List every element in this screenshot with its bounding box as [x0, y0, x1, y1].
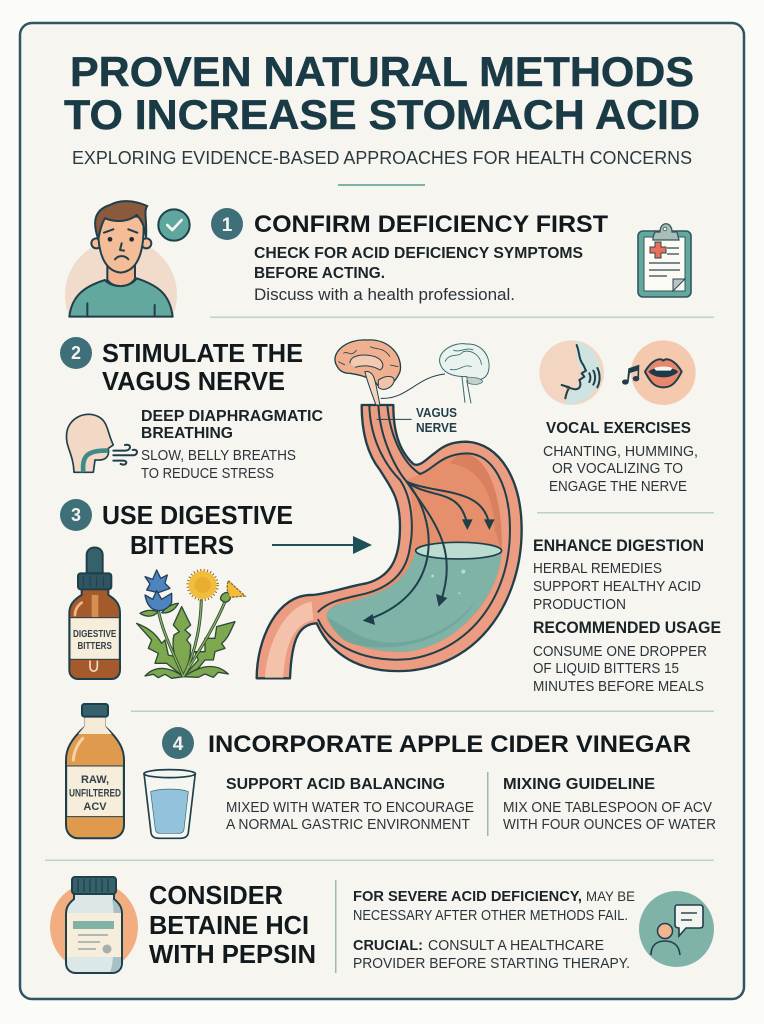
step 2: [60, 337, 303, 396]
text: support acid balancing: MIXED WITH WATER TO ENCOURAGE: [226, 799, 474, 816]
text: check symptoms: BEFORE ACTING.: [254, 265, 385, 282]
nerve arrows: [378, 405, 467, 525]
text: severe deficiency and consult: NECESSARY AFTER OTHER METHODS FAIL.: [353, 907, 628, 924]
text: enhance digestion: PRODUCTION: [533, 596, 626, 613]
text: mixing guideline: [503, 776, 716, 833]
badge 4: [162, 727, 194, 759]
icon: vocal exercises: [539, 340, 696, 405]
stomach outer wall: [257, 405, 522, 678]
badge 2: 2: [71, 343, 81, 363]
badge 1: [211, 208, 243, 240]
text: severe deficiency and consult: PROVIDER BEFORE STARTING THERAPY.: [353, 955, 630, 972]
heading: betaine HCl: CONSIDER: [149, 880, 283, 910]
text: vocal exercises: OR VOCALIZING TO: [552, 460, 683, 477]
text: vocal exercises: CHANTING, HUMMING,: [543, 443, 698, 460]
arrow to stomach: [272, 536, 372, 554]
badge 4: 4: [173, 734, 184, 755]
text: recommended usage: CONSUME ONE DROPPER: [533, 643, 707, 660]
step 3: [60, 499, 293, 560]
text: deep diaphragmatic breathing: SLOW, BELLY BREATHS: [141, 448, 296, 464]
text: enhance digestion: HERBAL REMEDIES: [533, 560, 662, 577]
text: recommended usage: OF LIQUID BITTERS 15: [533, 660, 679, 677]
text: enhance digestion: SUPPORT HEALTHY ACID: [533, 578, 701, 595]
text: severe deficiency and consult: MAY BE: [586, 888, 635, 904]
text: severe deficiency and consult: FOR SEVERE ACID DEFICIENCY,: [353, 888, 582, 905]
text: recommended usage: MINUTES BEFORE MEALS: [533, 678, 704, 695]
title: PROVEN NATURAL METHODS: [70, 48, 694, 95]
title: [64, 48, 700, 138]
icon: clipboard: [638, 224, 691, 297]
text: discuss: Discuss with a health professional.: [254, 285, 515, 304]
icon: apple cider vinegar bottle: RAW,: [81, 774, 109, 786]
step 4: [162, 727, 691, 759]
text: recommended usage: RECOMMENDED USAGE: [533, 619, 721, 637]
heading: stimulate the vagus nerve: STIMULATE THE: [102, 338, 303, 368]
icon: consult provider: [639, 891, 714, 967]
icon: apple cider vinegar bottle: [66, 704, 124, 838]
text: deep diaphragmatic breathing: BREATHING: [141, 425, 233, 442]
icon: digestive bitters bottle: [69, 547, 120, 679]
text: check symptoms: [254, 245, 583, 282]
brain right: [440, 344, 489, 403]
icon: glass of water: [144, 770, 195, 838]
text: mixing guideline: WITH FOUR OUNCES OF WATER: [503, 816, 716, 833]
badge 2: [60, 337, 92, 369]
subtitle: EXPLORING EVIDENCE-BASED APPROACHES FOR HEALTH CONCERNS: [72, 148, 692, 168]
badge 3: [60, 499, 92, 531]
icon: betaine supplement bottle: [50, 877, 138, 973]
heading: use digestive bitters: BITTERS: [130, 530, 234, 560]
text: mixing guideline: MIXING GUIDELINE: [503, 776, 655, 793]
text: support acid balancing: SUPPORT ACID BALANCING: [226, 776, 445, 793]
gastric liquid: [326, 550, 502, 652]
text: deep diaphragmatic breathing: DEEP DIAPHRAGMATIC: [141, 408, 323, 425]
lips in circle: [631, 340, 696, 405]
text: vocal exercises: [543, 420, 698, 495]
icon: apple cider vinegar bottle: UNFILTERED: [69, 788, 121, 800]
heading: use digestive bitters: USE DIGESTIVE: [102, 500, 293, 530]
text: severe deficiency and consult: [353, 888, 635, 972]
icon: breathing head: [66, 414, 137, 472]
icon: worried person with check: [65, 201, 190, 317]
connecting nerve: [381, 374, 445, 398]
text: vocal exercises: ENGAGE THE NERVE: [549, 478, 687, 495]
icon: dandelion and gentian plant: [137, 570, 245, 678]
text: deep diaphragmatic breathing: [141, 408, 323, 482]
inner wall lines: [318, 405, 412, 612]
text: enhance digestion: [533, 537, 704, 613]
icon: apple cider vinegar bottle: ACV: [83, 801, 107, 813]
heading: apple cider vinegar: INCORPORATE APPLE CIDER VINEGAR: [208, 731, 691, 758]
text: enhance digestion: ENHANCE DIGESTION: [533, 537, 704, 555]
text: recommended usage: [533, 619, 721, 695]
text: vocal exercises: VOCAL EXERCISES: [546, 420, 691, 437]
heading: confirm deficiency: CONFIRM DEFICIENCY FIRST: [254, 211, 608, 238]
brain left: [335, 340, 400, 405]
heading: use digestive bitters: [102, 500, 293, 560]
text: deep diaphragmatic breathing: TO REDUCE STRESS: [141, 466, 274, 482]
title: TO INCREASE STOMACH ACID: [64, 91, 700, 138]
heading: stimulate the vagus nerve: VAGUS NERVE: [102, 366, 285, 396]
heading: stimulate the vagus nerve: [102, 338, 303, 396]
label: vagus nerve: VAGUS: [416, 406, 457, 420]
heading: betaine HCl: WITH PEPSIN: [149, 939, 316, 969]
text: support acid balancing: [226, 776, 474, 833]
heading: betaine HCl: BETAINE HCI: [149, 910, 309, 940]
music note: [622, 365, 639, 385]
text: mixing guideline: MIX ONE TABLESPOON OF ACV: [503, 799, 712, 816]
speaking face: [539, 340, 604, 405]
text: severe deficiency and consult: CONSULT A HEALTHCARE: [428, 937, 604, 954]
label: vagus nerve: [416, 406, 457, 435]
illustration: brain and stomach with vagus nerve: [257, 340, 522, 678]
stomach cavity: [326, 454, 502, 652]
badge 1: 1: [222, 215, 233, 236]
text: severe deficiency and consult: CRUCIAL:: [353, 937, 423, 954]
heading: betaine HCl: [149, 880, 316, 969]
icon: digestive bitters bottle: DIGESTIVE: [73, 629, 116, 640]
label: vagus nerve: NERVE: [416, 421, 457, 435]
text: support acid balancing: A NORMAL GASTRIC ENVIRONMENT: [226, 816, 470, 833]
text: check symptoms: CHECK FOR ACID DEFICIENCY SYMPTOMS: [254, 245, 583, 262]
icon: digestive bitters bottle: BITTERS: [77, 641, 112, 652]
step 1: [211, 208, 608, 304]
badge 3: 3: [71, 505, 81, 525]
